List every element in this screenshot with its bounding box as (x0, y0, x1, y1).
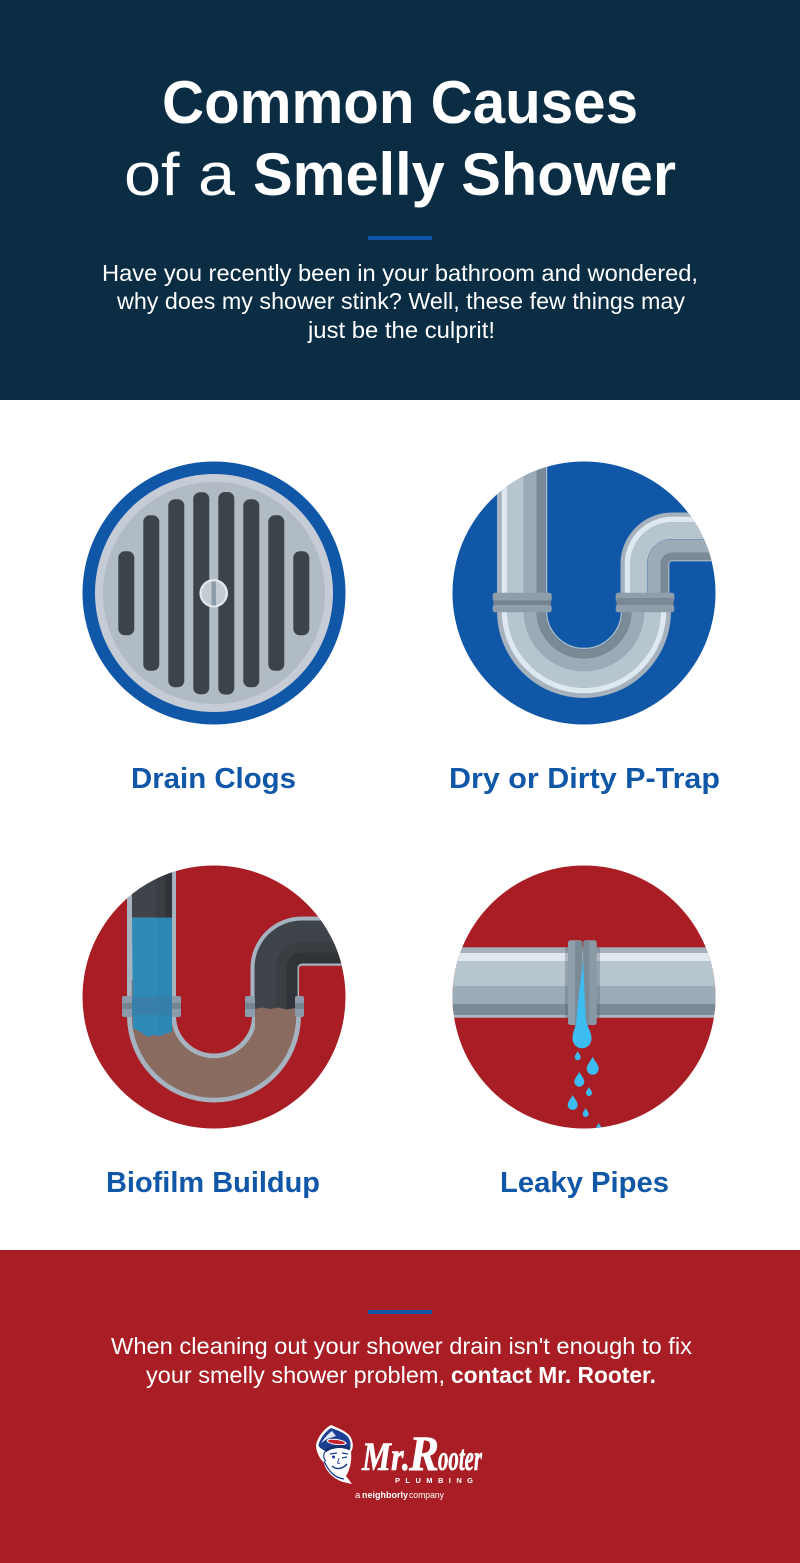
intro text: why does my shower stink? Well, these few things may (116, 288, 685, 314)
panel: footer (0, 1250, 800, 1563)
logo: Mr. Rooter Plumbing (316, 1425, 483, 1501)
panel: drain clogs (82, 462, 346, 795)
title (124, 69, 676, 208)
icon: p-trap pipe (452, 462, 716, 724)
elbow interior (276, 942, 360, 1012)
tagline: neighborly (362, 1490, 409, 1501)
water stream and drops (568, 960, 602, 1134)
label: biofilm buildup: Biofilm Buildup (106, 1167, 320, 1199)
wordmark (361, 1425, 483, 1481)
closing text (111, 1333, 692, 1388)
intro text: just be the culprit! (307, 317, 495, 343)
tagline: a (355, 1490, 361, 1501)
coupling right (616, 593, 674, 612)
icon: leaking pipe (452, 866, 716, 1128)
closing text: your smelly shower problem, (146, 1362, 445, 1388)
pipe wall (152, 850, 360, 1078)
intro text (102, 260, 698, 343)
title: of a (124, 141, 236, 208)
panel: leaky pipes (452, 866, 716, 1198)
label: dry or dirty p-trap: Dry or Dirty P-Trap (449, 763, 720, 795)
closing text: When cleaning out your shower drain isn't enough to fix (111, 1333, 692, 1359)
standing water (132, 918, 172, 1037)
wordmark: R (408, 1425, 439, 1481)
title: Smelly Shower (253, 141, 676, 208)
pipe (452, 947, 716, 1018)
label: drain clogs: Drain Clogs (131, 763, 296, 795)
sludge surface right (255, 1008, 295, 1030)
panel: header (0, 0, 800, 400)
intro text: Have you recently been in your bathroom and wondered, (102, 260, 698, 286)
panel: dry or dirty p-trap (451, 462, 719, 794)
icon: drain grate (82, 462, 346, 724)
icon: clogged pipe (82, 866, 346, 1128)
coupling (568, 940, 597, 1025)
tagline: company (409, 1490, 444, 1501)
couplings (122, 996, 304, 1017)
left dark air column (132, 872, 172, 918)
sludge (152, 980, 276, 1078)
tagline (355, 1490, 444, 1501)
wordmark: ooter (438, 1438, 483, 1478)
plumbing label: PLUMBING (395, 1476, 473, 1485)
wordmark: Mr. (361, 1434, 410, 1479)
icon: mascot head (316, 1425, 353, 1484)
coupling left (493, 593, 552, 612)
title: Common Causes (162, 69, 638, 136)
closing text: contact Mr. Rooter. (451, 1362, 656, 1388)
panel: biofilm buildup (82, 850, 360, 1199)
label: leaky pipes: Leaky Pipes (500, 1167, 669, 1199)
